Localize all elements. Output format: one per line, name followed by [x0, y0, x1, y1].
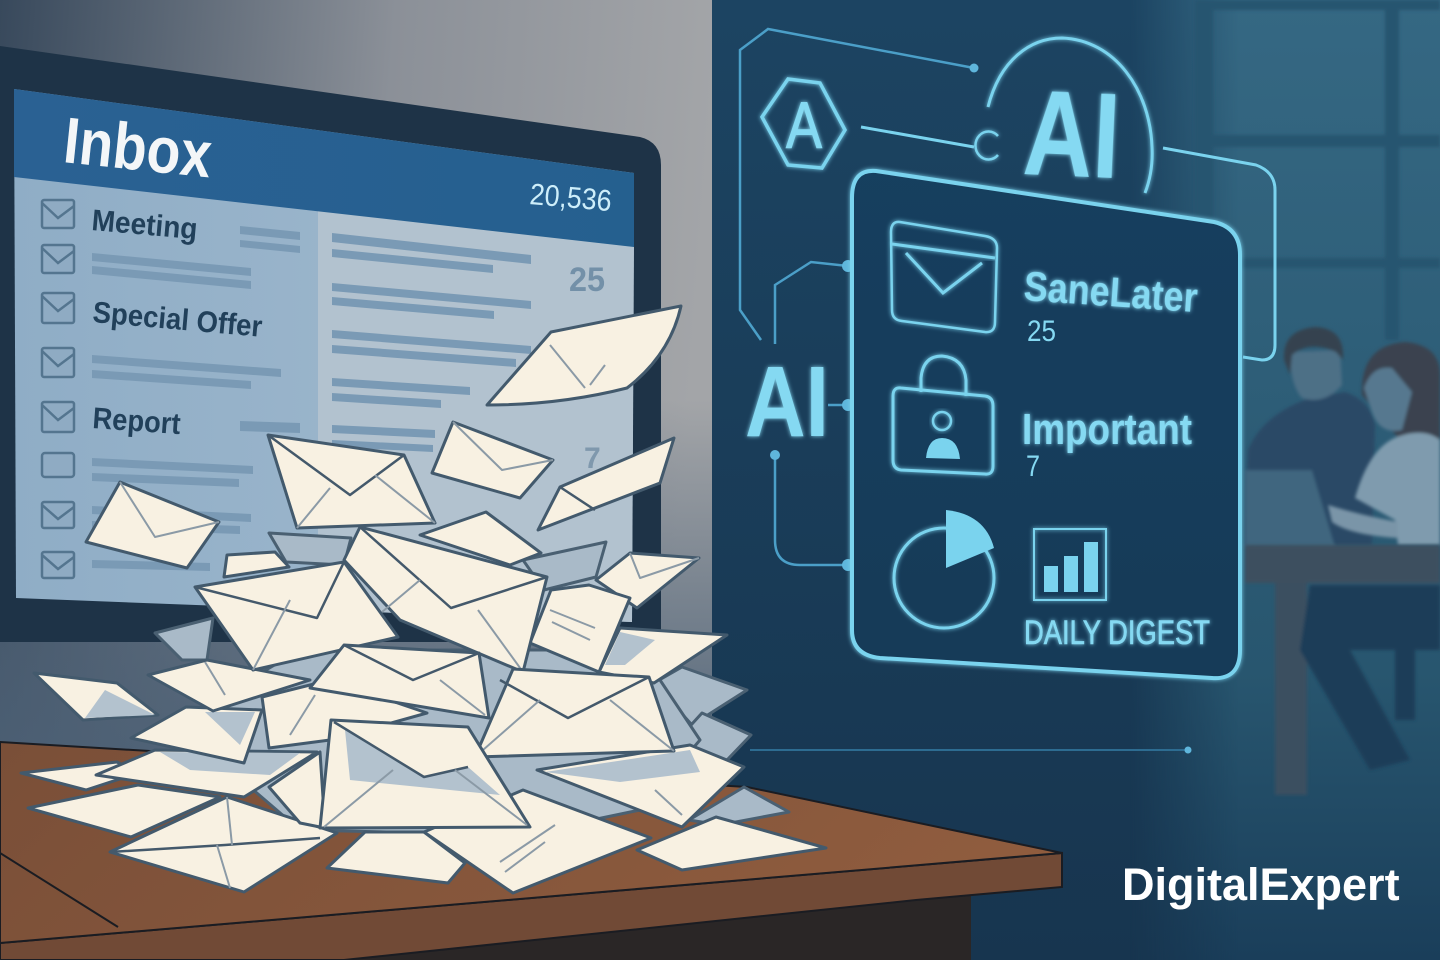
flying envelope: centre right: [432, 422, 553, 498]
office table: [1245, 545, 1440, 795]
inbox header: [14, 89, 634, 247]
Important count: 7: [1026, 450, 1040, 483]
front main envelope: [320, 720, 530, 828]
inbox item: Meeting: [42, 200, 300, 253]
desk: [0, 742, 1062, 960]
flying envelope: top of pile: [268, 435, 435, 528]
monitor: [0, 46, 661, 642]
message count: 20,536: [528, 178, 613, 218]
inbox item: eighth row: [42, 552, 210, 578]
Daily Digest label: DAILY DIGEST: [1024, 614, 1210, 652]
right message pane: [318, 210, 634, 622]
flying envelopes: [34, 306, 681, 720]
window and office people background: [1130, 0, 1440, 960]
inbox item: Report: Report: [92, 402, 182, 441]
middle envelopes: [148, 512, 727, 757]
loose sheet top right: [487, 306, 681, 405]
loose envelope far left: [34, 673, 158, 720]
brand logo: DigitalExpert: [1122, 859, 1400, 910]
panel frame: [852, 171, 1240, 678]
under-desk shadow: [300, 880, 971, 960]
SaneLater count: 25: [1027, 315, 1056, 348]
flying envelope: right: [538, 438, 674, 530]
icon: pie chart: [894, 510, 994, 628]
SaneLater label: SaneLater: [1022, 262, 1199, 321]
icon: lock with person: [893, 356, 993, 474]
wall background: [0, 0, 714, 960]
inbox item: second row: [42, 245, 251, 289]
icon: envelope: [891, 222, 997, 332]
wall lower shading: [0, 400, 714, 800]
message preview lines: [332, 233, 531, 452]
monitor bezel: [0, 46, 661, 642]
dark blue digital background: [712, 0, 1440, 960]
inbox item: Report: [42, 402, 300, 441]
bottom spread envelopes: [21, 680, 826, 893]
hexagon A icon: A: [786, 88, 822, 162]
large AI heading: AI: [1021, 64, 1123, 204]
man: [1245, 327, 1375, 545]
left AI label: AI: [745, 346, 829, 458]
inbox item: Special Offer: [42, 293, 264, 344]
small connector C: [975, 132, 998, 160]
arc behind AI: [988, 38, 1152, 193]
shaded back envelopes: [155, 533, 789, 835]
inbox item: fourth row: [42, 348, 281, 389]
envelope pile: [21, 512, 826, 893]
hexagon A icon: [762, 79, 845, 168]
woman: [1328, 342, 1440, 545]
desk front edge: [0, 853, 1062, 960]
laptop: [1245, 470, 1336, 550]
preview count 25: 25: [569, 261, 605, 299]
inbox item: Meeting: Meeting: [90, 204, 199, 246]
room tint: [1130, 0, 1440, 960]
screen body: [14, 89, 634, 622]
desk top: [0, 742, 1062, 943]
circuit lines: [740, 29, 1275, 754]
inbox title: Inbox: [61, 103, 215, 191]
Important label: Important: [1022, 405, 1192, 454]
window: [1195, 0, 1440, 350]
inbox item: sixth row: [42, 453, 253, 487]
AI sorted panel: [852, 171, 1240, 678]
inbox item: seventh row: [42, 502, 251, 534]
inbox item: Special Offer: Special Offer: [91, 296, 264, 344]
icon: bar chart: [1034, 529, 1106, 600]
flying envelope: left: [86, 482, 219, 568]
desk edge line: [0, 853, 118, 927]
preview count 7: 7: [584, 442, 601, 475]
